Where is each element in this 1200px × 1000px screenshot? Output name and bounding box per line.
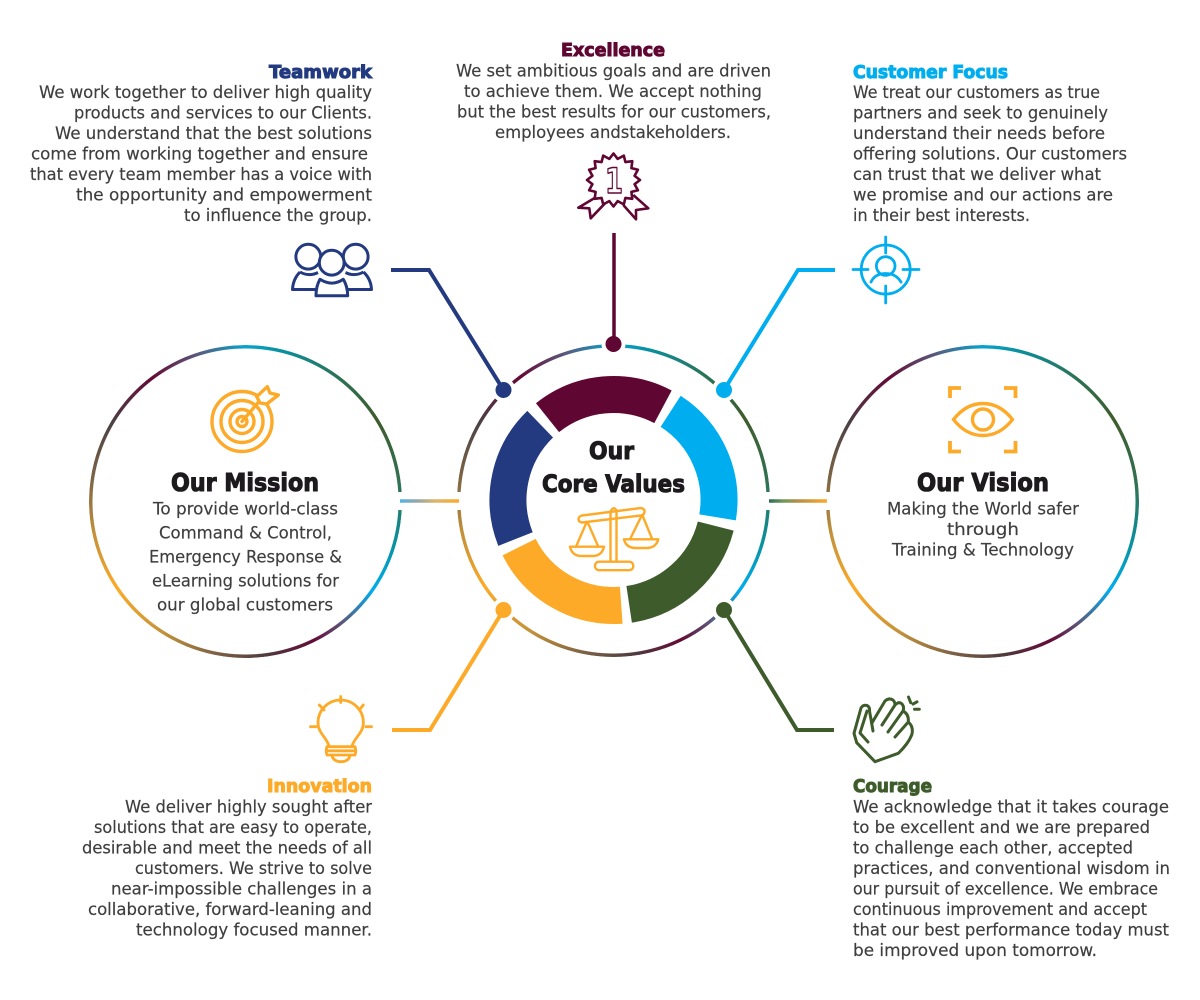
- ring: core values circle outline: [457, 344, 770, 657]
- ring: mission circle outline: [88, 344, 402, 658]
- ring gaps at the connectors: [396, 492, 832, 510]
- text block: courage: our pursuit of excellence. We embrace: [853, 880, 1158, 898]
- text block: courage: to be excellent and we are prepared: [853, 818, 1150, 837]
- text block: our vision: through: [947, 520, 1019, 539]
- text block: courage: [853, 777, 1170, 960]
- text block: customer focus: in their best interests.: [853, 206, 1030, 225]
- connector and node: innovation: [392, 598, 516, 730]
- icon: excellence award badge: [578, 154, 648, 219]
- text block: innovation: We deliver highly sought after: [125, 798, 372, 816]
- donut chart: five value segments: [465, 352, 762, 648]
- text block: innovation: collaborative, forward-leaning and: [88, 900, 372, 919]
- connector and node: courage: [712, 598, 834, 730]
- text block: excellence: to achieve them. We accept nothing: [464, 82, 762, 101]
- text block: excellence: We set ambitious goals and are driven: [456, 62, 771, 80]
- text block: our vision: Our Vision: [917, 468, 1049, 497]
- text block: customer focus: partners and seek to genuinely: [853, 104, 1108, 122]
- text block: excellence: employees andstakeholders.: [495, 123, 731, 142]
- text block: excellence: Excellence: [561, 41, 665, 61]
- text block: teamwork: [30, 63, 372, 225]
- connector: core to vision: [769, 499, 827, 503]
- text block: innovation: solutions that are easy to operate,: [94, 818, 372, 837]
- text block: customer focus: can trust that we deliver what: [853, 165, 1101, 184]
- text block: customer focus: We treat our customers as true: [853, 83, 1100, 102]
- text block: customer focus: offering solutions. Our customers: [853, 144, 1127, 164]
- icon: scales of justice: [570, 508, 658, 570]
- text block: courage: practices, and conventional wisdom in: [853, 859, 1170, 878]
- text block: our vision: Training & Technology: [891, 540, 1074, 560]
- text block: innovation: desirable and meet the needs of all: [82, 838, 372, 858]
- text block: customer focus: [853, 63, 1127, 225]
- text block: courage: be improved upon tomorrow.: [853, 941, 1097, 960]
- icon: teamwork people: [292, 244, 372, 296]
- connector and node: teamwork: [391, 270, 516, 402]
- connector: mission to core: [400, 499, 459, 503]
- text block: teamwork: Teamwork: [269, 63, 372, 83]
- text block: innovation: Innovation: [267, 777, 372, 797]
- text block: courage: that our best performance today must: [853, 920, 1169, 940]
- text block: teamwork: come from working together and ensure: [31, 144, 368, 164]
- icon: innovation light bulb: [310, 696, 372, 762]
- heading: our core values: Core Values: [542, 470, 685, 498]
- text block: teamwork: We understand that the best solutions: [55, 124, 372, 143]
- connector and node: customer focus: [712, 270, 835, 402]
- icon: customer focus target: [853, 237, 919, 303]
- text block: courage: Courage: [853, 777, 932, 797]
- text block: excellence: but the best results for our customers,: [457, 102, 771, 122]
- text block: excellence: [456, 41, 771, 142]
- heading: our core values: [542, 437, 685, 498]
- text block: teamwork: the opportunity and empowerment: [76, 186, 372, 204]
- text block: innovation: customers. We strive to solve: [135, 859, 372, 878]
- connector and node: excellence: [602, 233, 626, 356]
- text block: our mission: [149, 468, 342, 614]
- text block: teamwork: products and services to our Clients.: [74, 104, 372, 122]
- text block: innovation: near-impossible challenges in a: [111, 880, 372, 898]
- icon: courage clapping hands: [854, 697, 919, 762]
- text block: our mission: Emergency Response &: [149, 548, 342, 566]
- text block: courage: continuous improvement and accept: [853, 900, 1147, 919]
- text block: teamwork: to influence the group.: [184, 206, 372, 225]
- icon: excellence award badge: 1: [605, 162, 623, 202]
- ring: vision circle outline: [826, 344, 1138, 658]
- text block: customer focus: we promise and our actions are: [853, 186, 1113, 204]
- text block: our vision: Making the World safer: [887, 500, 1079, 518]
- text block: our mission: our global customers: [157, 596, 333, 614]
- text block: courage: We acknowledge that it takes courage: [853, 798, 1169, 816]
- text block: our mission: eLearning solutions for: [152, 572, 339, 590]
- text block: innovation: [82, 777, 372, 940]
- icon: vision eye in frame: [950, 388, 1016, 452]
- text block: innovation: technology focused manner.: [136, 920, 372, 940]
- text block: teamwork: We work together to deliver high quality: [39, 83, 372, 102]
- text block: customer focus: Customer Focus: [853, 63, 1008, 83]
- text block: our mission: To provide world-class: [152, 500, 338, 518]
- text block: our mission: Command & Control,: [159, 524, 332, 542]
- heading: our core values: Our: [589, 437, 634, 465]
- text block: our vision: [887, 468, 1079, 560]
- text block: teamwork: that every team member has a voice with: [30, 165, 372, 184]
- icon: mission target and arrow: [212, 387, 278, 452]
- text block: customer focus: understand their needs before: [853, 124, 1105, 143]
- text block: our mission: Our Mission: [171, 468, 319, 497]
- text block: courage: to challenge each other, accepted: [853, 838, 1133, 858]
